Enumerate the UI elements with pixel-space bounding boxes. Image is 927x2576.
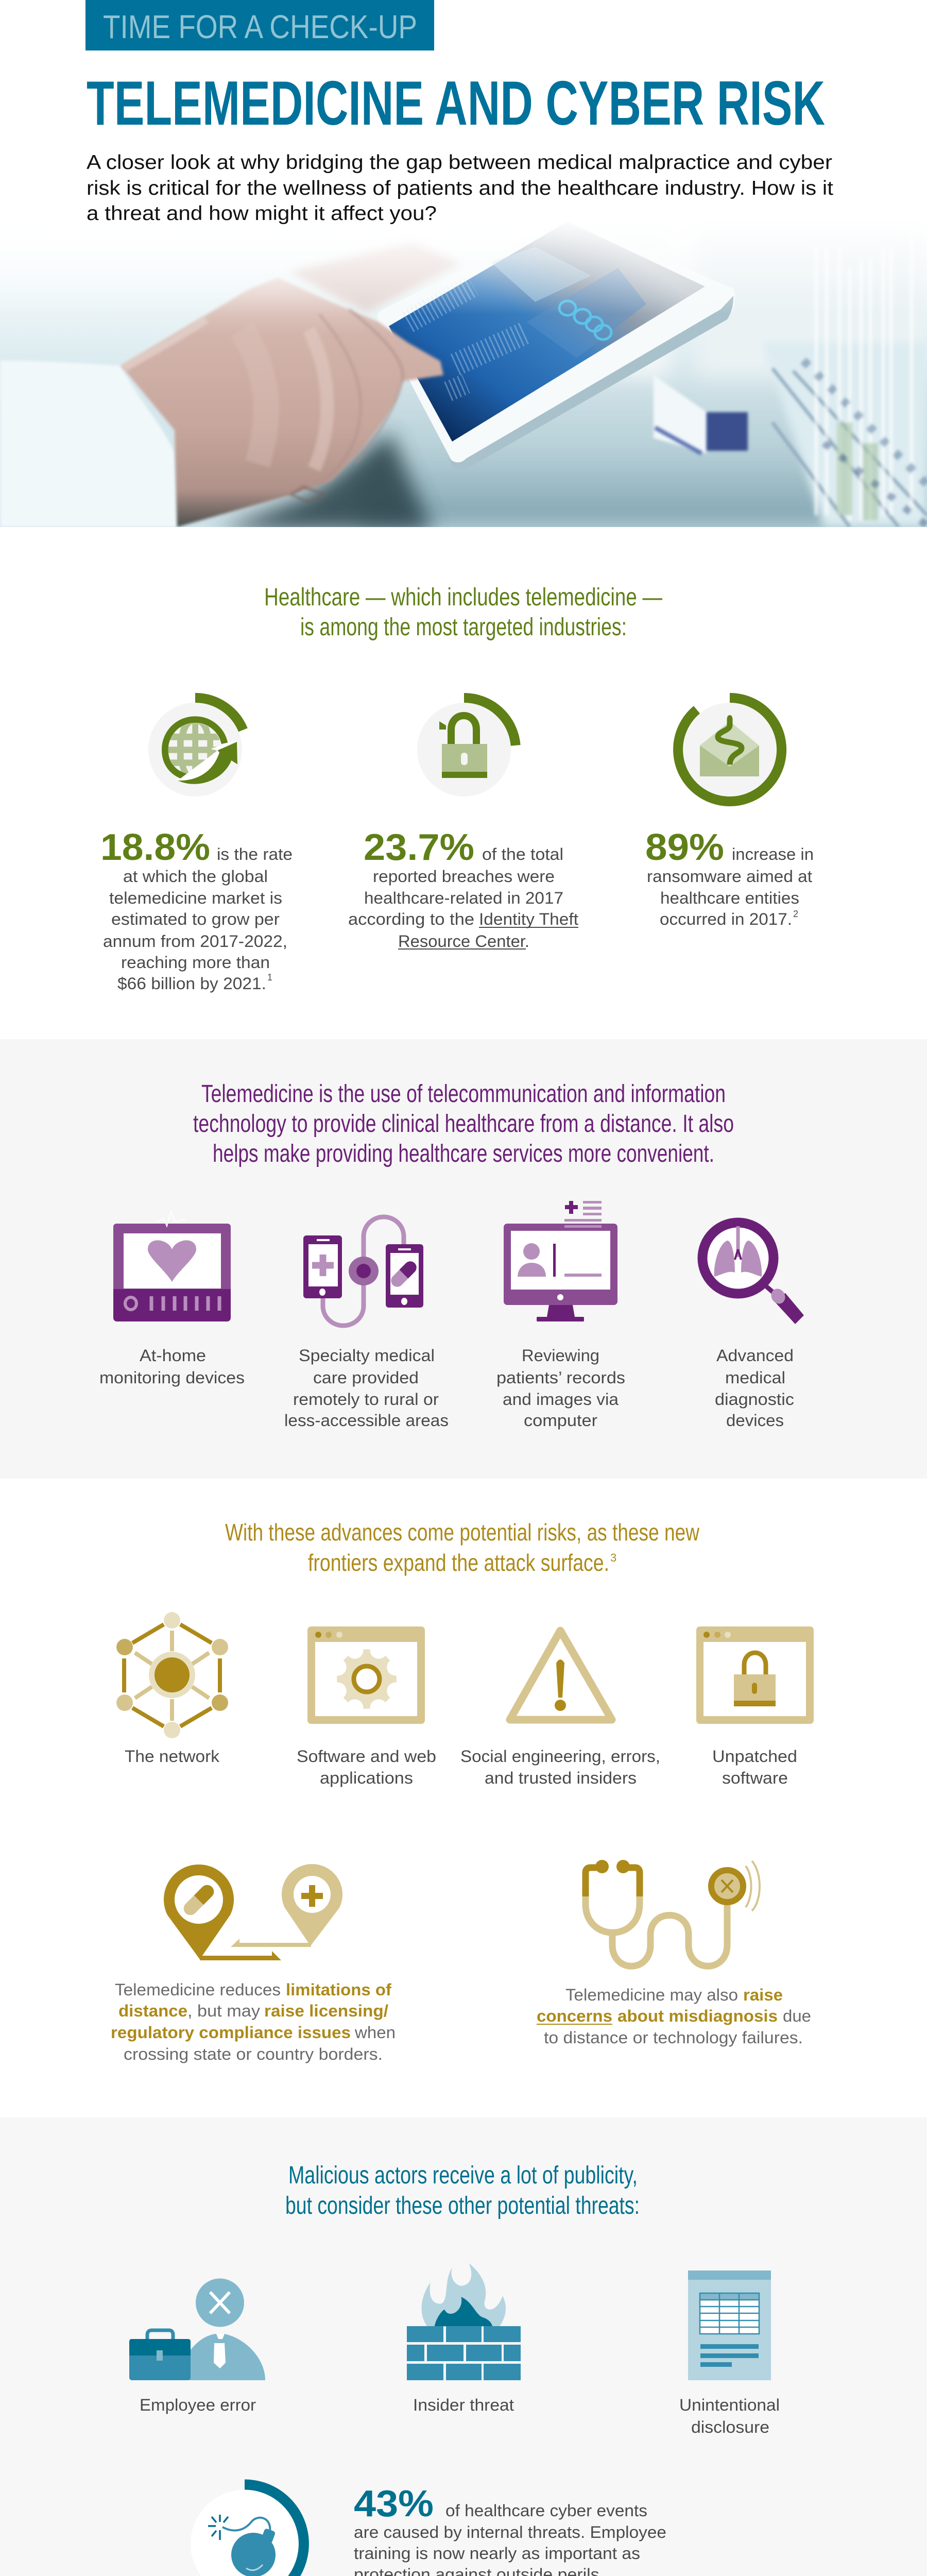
icon: open lock — [417, 698, 516, 796]
heading: malicious actors: but consider these other potential threats: — [285, 2192, 640, 2219]
labels: attack surface: Unpatched — [712, 1747, 797, 1766]
far hand — [290, 242, 461, 312]
labels: threats — [140, 2396, 780, 2436]
heading: risks: frontiers expand the attack surface. — [308, 1549, 609, 1576]
labels: telemedicine uses: Reviewing — [522, 1346, 599, 1365]
text: limitations of distance: distance — [118, 2002, 187, 2020]
labels: telemedicine uses: medical — [725, 1368, 785, 1387]
intro text — [87, 151, 833, 225]
icon: bomb with 43% ring — [191, 2484, 304, 2576]
bottle — [654, 375, 707, 453]
icon: connected phones — [303, 1217, 423, 1326]
labels: telemedicine uses: monitoring devices — [99, 1368, 245, 1387]
stat: 89%: ransomware aimed at — [647, 867, 812, 886]
heading: telemedicine definition: technology to provide clinical healthcare from a distance. It also — [193, 1110, 734, 1138]
labels: threats: disclosure — [691, 2418, 769, 2436]
text: misdiagnosis — [537, 1986, 811, 2047]
text: limitations of distance: Telemedicine reduces — [115, 1980, 281, 1999]
labels: telemedicine uses — [99, 1346, 794, 1430]
stat: 18.8%: at which the global — [123, 867, 268, 886]
stat: 18.8%: estimated to grow per — [111, 910, 280, 928]
heading: risks: With these advances come potential risks, as these new — [225, 1519, 700, 1546]
text: misdiagnosis: about misdiagnosis — [617, 2007, 778, 2025]
icon: document disclosure — [688, 2270, 771, 2380]
icon: employee error — [129, 2278, 265, 2380]
stat: 18.8%: annum from 2017-2022, — [103, 932, 287, 951]
stat: 23.7%: Identity Theft — [479, 910, 578, 928]
icon: stethoscope — [586, 1860, 760, 1966]
icon: computer with patient record — [504, 1201, 617, 1321]
stat: 89%: 2 — [793, 909, 798, 919]
labels: attack surface: applications — [320, 1769, 413, 1787]
icon: network — [116, 1612, 228, 1738]
labels: attack surface: Social engineering, errors, — [460, 1747, 660, 1766]
icon: home monitor — [113, 1211, 231, 1321]
test tubes rack — [762, 343, 927, 527]
text: limitations of distance: , but may — [187, 2002, 260, 2020]
icon: unpatched software window — [696, 1626, 814, 1724]
heading: healthcare — [264, 584, 662, 641]
heading: malicious actors — [285, 2162, 640, 2219]
heading: telemedicine definition: helps make providing healthcare services more convenient. — [213, 1140, 714, 1167]
heading: risks — [225, 1519, 700, 1576]
labels: telemedicine uses: computer — [524, 1411, 597, 1430]
stat: 89%: healthcare entities — [660, 889, 799, 907]
main hand — [121, 278, 443, 527]
text: misdiagnosis: raise — [743, 1986, 783, 2004]
labels: attack surface: software — [722, 1769, 788, 1787]
labels: telemedicine uses: Specialty medical — [299, 1346, 435, 1365]
stat: 43%: are caused by internal threats. Employee — [354, 2523, 666, 2541]
icon: warning triangle — [510, 1631, 612, 1720]
table shadow — [216, 433, 433, 531]
icon: firewall insider threat — [407, 2263, 521, 2380]
icon: ransomware envelope — [678, 698, 782, 801]
labels: telemedicine uses: care provided — [313, 1368, 419, 1387]
intro text: A closer look at why bridging the gap between medical malpractice and cyber — [87, 151, 832, 174]
icon: magnifier over lungs — [702, 1223, 804, 1324]
text: limitations of distance: crossing state or country borders. — [124, 2045, 383, 2063]
heading: risks: 3 — [610, 1551, 616, 1564]
stat: 23.7%: 23.7% — [364, 827, 474, 868]
labels: attack surface: The network — [125, 1747, 220, 1766]
text: misdiagnosis: to distance or technology failures. — [544, 2028, 803, 2047]
stat: 43%: 43% — [354, 2483, 434, 2524]
labels: telemedicine uses: At-home — [140, 1346, 206, 1365]
stat: 18.8%: 1 — [267, 972, 272, 982]
labels: telemedicine uses: less-accessible areas — [284, 1411, 449, 1430]
labels: telemedicine uses: and images via — [503, 1390, 619, 1409]
heading: healthcare: Healthcare — which includes telemedicine — — [264, 584, 662, 611]
labels: telemedicine uses: remotely to rural or — [293, 1390, 439, 1409]
labels: telemedicine uses: devices — [726, 1411, 784, 1430]
stat: 18.8%: is the rate — [217, 845, 293, 863]
stat: 89%: increase in — [732, 845, 814, 863]
heading: telemedicine definition: Telemedicine is the use of telecommunication and information — [201, 1080, 726, 1108]
hero photo: hand using tablet — [0, 216, 927, 531]
heading: telemedicine definition — [193, 1080, 734, 1167]
icon: globe with growth arrow — [148, 698, 243, 796]
stat: 43%: training is now nearly as important as — [354, 2544, 640, 2563]
labels: telemedicine uses: diagnostic — [715, 1390, 794, 1409]
text: misdiagnosis: concerns — [537, 2007, 612, 2025]
stat: 23.7%: healthcare-related in 2017 — [364, 889, 563, 907]
icon: software window with gear — [307, 1626, 425, 1724]
banner — [85, 0, 434, 50]
intro text: risk is critical for the wellness of patients and the healthcare industry. How is it — [87, 177, 833, 199]
stat: 18.8%: reaching more than — [121, 953, 270, 972]
labels: attack surface: and trusted insiders — [485, 1769, 637, 1787]
icon: map pins — [164, 1864, 342, 1960]
sleeve — [0, 361, 177, 527]
stat: 23.7%: according to the — [348, 910, 474, 928]
tablet screen — [389, 222, 705, 442]
stat: 23.7% — [348, 827, 578, 951]
labels: threats: Employee error — [140, 2396, 256, 2414]
text: misdiagnosis: due — [783, 2007, 811, 2025]
labels: attack surface: Software and web — [297, 1747, 436, 1766]
stat: 23.7%: reported breaches were — [373, 867, 555, 886]
stat: 23.7%: of the total — [482, 845, 563, 863]
banner: TIME FOR A CHECK-UP — [103, 8, 417, 45]
intro text: a threat and how might it affect you? — [87, 202, 437, 225]
text: limitations of distance: limitations of — [286, 1980, 391, 1999]
stat: 18.8%: telemedicine market is — [109, 889, 282, 907]
heading: healthcare: is among the most targeted industries: — [300, 614, 627, 641]
stat: 18.8%: $66 billion by 2021. — [117, 974, 266, 993]
labels: telemedicine uses: patients’ records — [496, 1368, 625, 1387]
stat: 89%: occurred in 2017. — [660, 910, 792, 928]
heading: malicious actors: Malicious actors receive a lot of publicity, — [288, 2162, 638, 2189]
stat: 43%: of healthcare cyber events — [445, 2501, 647, 2520]
stat: 43% — [354, 2483, 666, 2576]
stat: 18.8% — [100, 827, 293, 993]
text: limitations of distance — [111, 1980, 396, 2063]
tablet body — [377, 283, 735, 463]
text: limitations of distance: when — [354, 2023, 396, 2042]
stat: 23.7%: Resource Center. — [398, 932, 529, 951]
labels: threats: Unintentional — [679, 2396, 780, 2414]
stat: 89% — [645, 827, 814, 928]
finger shading — [124, 309, 403, 502]
labels: attack surface — [125, 1747, 797, 1787]
labels: telemedicine uses: Advanced — [716, 1346, 794, 1365]
stat: 89%: 89% — [645, 827, 724, 868]
labels: threats: Insider threat — [413, 2396, 514, 2414]
stat: 18.8%: 18.8% — [100, 827, 210, 868]
text: limitations of distance: raise licensing/ — [264, 2002, 388, 2020]
text: limitations of distance: regulatory compliance issues — [111, 2023, 351, 2042]
text: misdiagnosis: Telemedicine may also — [565, 1986, 738, 2004]
